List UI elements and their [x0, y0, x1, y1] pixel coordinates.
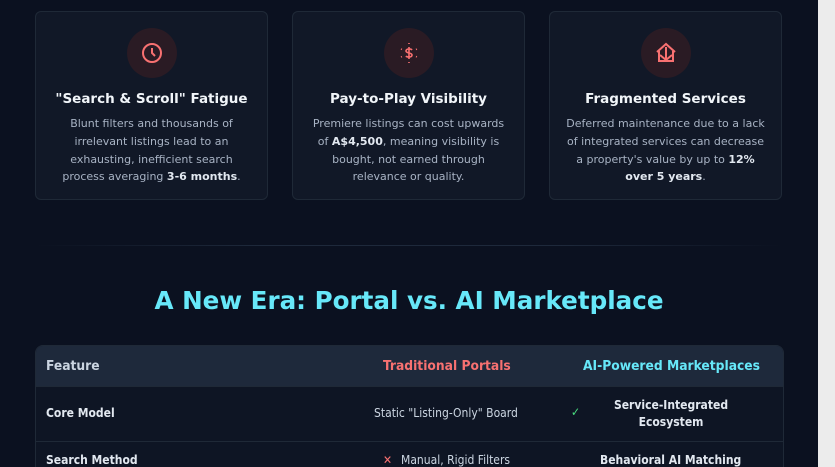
row: core model: Service-Integrated Ecosystem — [614, 398, 728, 429]
row: core model: ✓ — [571, 405, 580, 419]
card title: Pay-to-Play Visibility — [330, 91, 487, 107]
row: search method — [36, 441, 783, 467]
row: search method: Manual, Rigid Filters — [401, 453, 510, 467]
table header: Feature — [46, 358, 100, 374]
icon: house — [641, 28, 691, 78]
card body: Blunt filters and thousands of irrelevant listings lead to an exhausting, inefficient search process averaging 3-6 months. — [62, 117, 241, 183]
row: search method: Behavioral AI Matching — [600, 453, 741, 467]
table header — [36, 346, 783, 386]
heading: A New Era: Portal vs. AI Marketplace — [154, 286, 664, 315]
card: pay to play — [292, 11, 525, 200]
icon: clock — [127, 28, 177, 78]
table header: Traditional Portals — [383, 358, 511, 374]
card title: "Search & Scroll" Fatigue — [55, 91, 248, 107]
table header: AI-Powered Marketplaces — [583, 358, 760, 374]
row: core model: Static "Listing-Only" Board — [374, 406, 518, 420]
row: core model: Core Model — [46, 406, 115, 420]
row: search method: Search Method — [46, 453, 138, 467]
card body: Deferred maintenance due to a lack of integrated services can decrease a property's value by up to 12% over 5 years. — [566, 117, 765, 183]
row: search method: ✕ — [383, 453, 392, 467]
card body: Premiere listings can cost upwards of A$4,500, meaning visibility is bought, not earned through relevance or quality. — [313, 117, 504, 183]
card: search fatigue — [35, 11, 268, 200]
comparison table — [35, 345, 784, 467]
row: core model — [36, 386, 783, 442]
icon: dollar — [384, 28, 434, 78]
card title: Fragmented Services — [585, 91, 746, 107]
card: fragmented services — [549, 11, 782, 200]
